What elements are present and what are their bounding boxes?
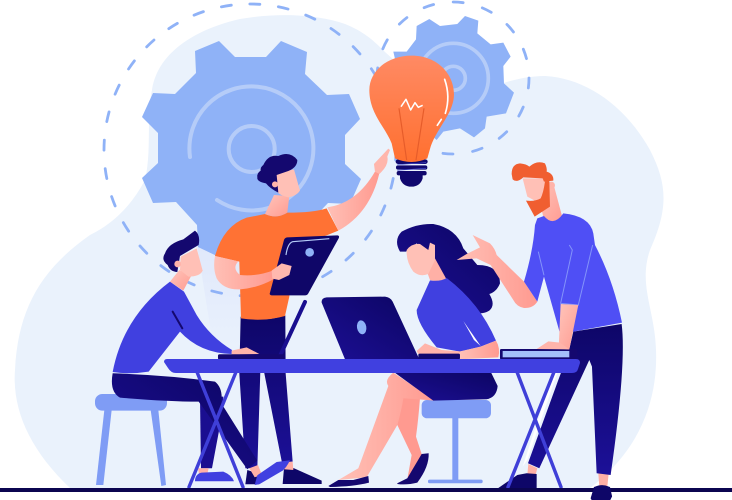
glass <box>369 56 454 162</box>
book <box>500 349 577 359</box>
shoes <box>328 453 429 487</box>
right table legs <box>508 372 561 487</box>
beard <box>526 180 550 217</box>
sleeve lines <box>538 245 593 305</box>
spark <box>401 99 423 110</box>
forward arm <box>457 235 537 308</box>
neck <box>427 258 446 281</box>
ear <box>174 261 181 267</box>
left table legs <box>189 372 243 487</box>
ankle <box>284 462 293 470</box>
face <box>523 178 550 202</box>
pale shadow under large gear <box>197 245 245 357</box>
table <box>164 359 580 487</box>
stool: left <box>95 394 167 486</box>
back shoe <box>195 472 234 481</box>
woman on laptop <box>322 224 500 487</box>
shirt <box>524 213 622 333</box>
shoes <box>498 473 612 500</box>
pointing hand <box>374 149 390 174</box>
neck <box>265 195 289 216</box>
back leg <box>200 397 223 468</box>
table top <box>164 359 580 373</box>
filament <box>399 108 424 160</box>
back ankle <box>198 468 209 474</box>
trousers <box>528 324 623 475</box>
standing man with tablet <box>214 154 339 484</box>
face <box>407 243 435 275</box>
neck <box>170 270 192 291</box>
tablet <box>270 235 339 295</box>
shirt <box>215 208 338 320</box>
small gear <box>393 16 514 140</box>
front shoe <box>255 460 290 485</box>
front leg <box>338 373 435 480</box>
bearded man leaning <box>457 162 623 500</box>
laptop <box>322 297 460 359</box>
top <box>417 278 496 352</box>
seated man at laptop <box>112 231 305 485</box>
trousers <box>112 373 257 469</box>
ear <box>272 181 278 187</box>
laptop <box>218 302 305 360</box>
bulb base <box>396 159 428 187</box>
ankles <box>527 464 609 487</box>
lightbulb <box>369 56 454 187</box>
sweater <box>113 282 232 373</box>
front shoe over ground <box>591 486 612 500</box>
hair <box>512 162 553 182</box>
supporting arm <box>559 304 578 349</box>
hand <box>232 347 259 355</box>
sleeve crease <box>173 312 182 328</box>
hand <box>537 341 569 349</box>
hair <box>163 231 199 272</box>
dashed orbit: small gear <box>377 2 529 154</box>
pants <box>239 315 293 468</box>
skirt <box>393 372 498 401</box>
top crease <box>463 321 481 346</box>
hair <box>257 154 297 193</box>
neck <box>537 183 563 223</box>
face <box>180 248 203 277</box>
stool <box>422 400 491 483</box>
leg sliver highlight <box>523 373 557 467</box>
dashed orbit: large gear <box>104 4 396 296</box>
glass highlight <box>437 79 448 125</box>
back leg <box>397 395 428 480</box>
arm <box>460 341 499 359</box>
ground line <box>0 488 732 492</box>
face <box>276 169 300 197</box>
large gear <box>142 41 361 257</box>
hand <box>417 343 460 355</box>
hair <box>397 224 500 313</box>
ear <box>548 182 555 189</box>
raised arm and hand <box>327 149 390 231</box>
shoes <box>245 468 322 484</box>
front ankle <box>249 465 262 477</box>
near arm <box>214 256 273 289</box>
hand on tablet <box>272 263 292 280</box>
